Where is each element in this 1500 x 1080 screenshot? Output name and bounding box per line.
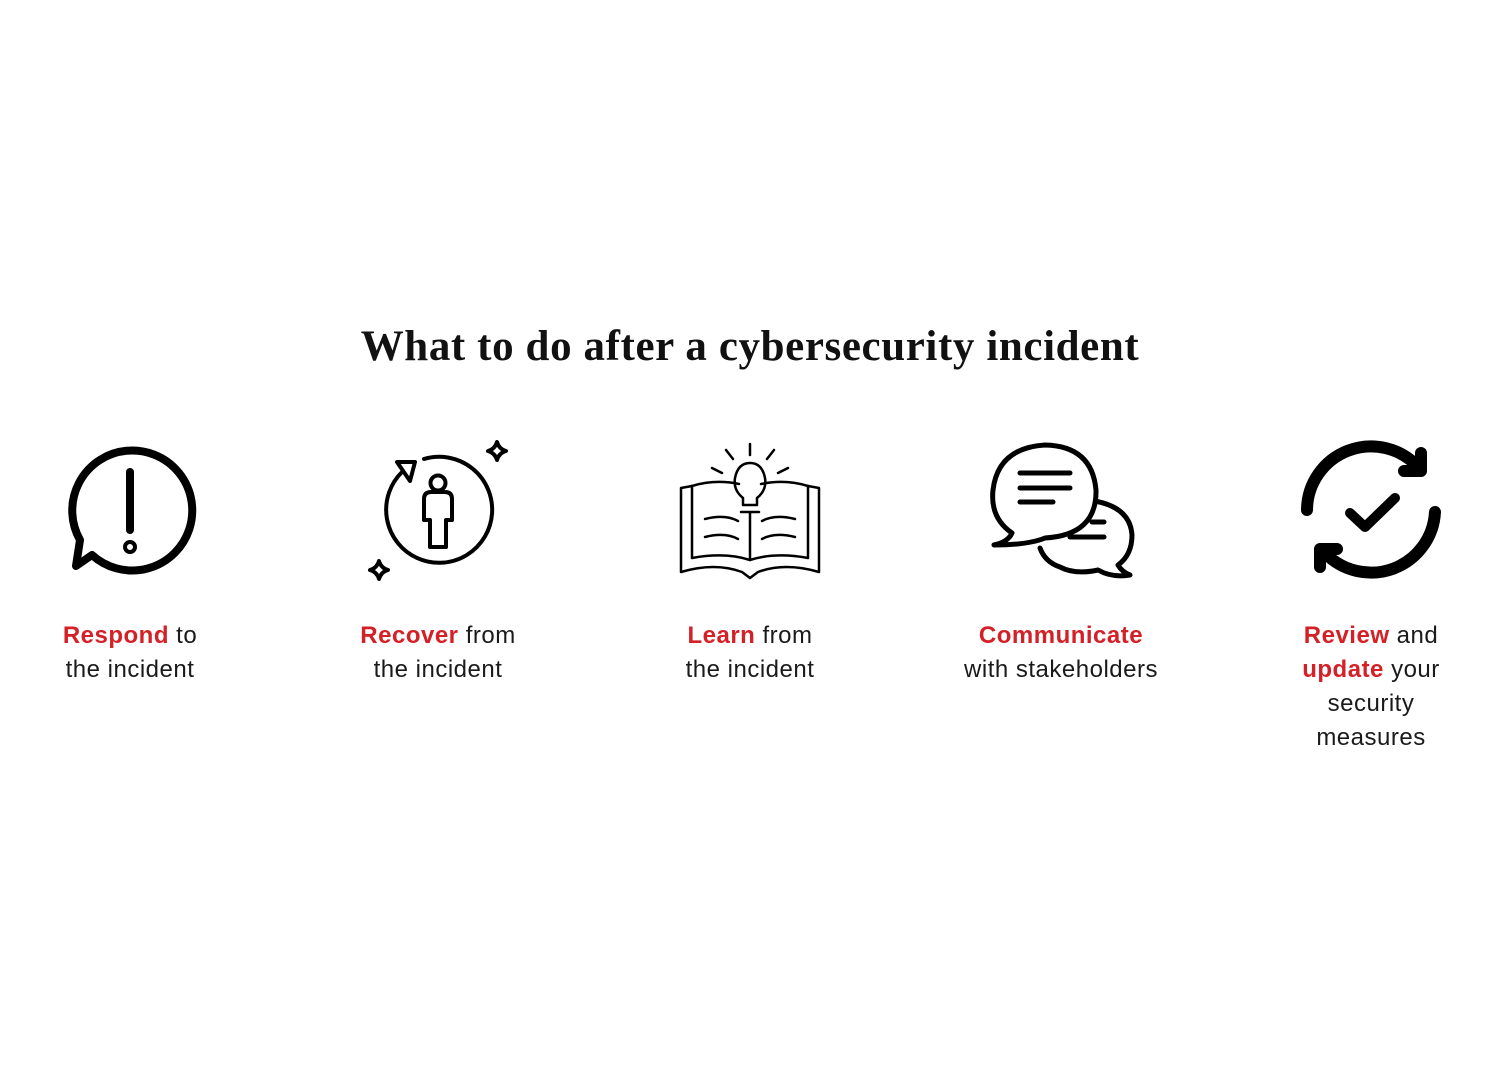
label: recover [360, 622, 516, 683]
label: learn [686, 622, 814, 683]
label: recover: the incident [374, 656, 502, 683]
label: respond [63, 622, 197, 683]
label: review: security [1328, 690, 1414, 717]
label: communicate: with stakeholders [964, 656, 1158, 683]
label: respond: Respond to [63, 622, 197, 649]
label: recover: Recover from [360, 622, 516, 649]
icon: refresh with check [1307, 446, 1435, 573]
label: review: Review and [1304, 622, 1438, 649]
label: review: measures [1316, 724, 1426, 751]
label: learn: Learn from [687, 622, 813, 649]
label: respond: the incident [66, 656, 194, 683]
label: communicate: Communicate [979, 622, 1143, 649]
icon: chat bubbles [993, 445, 1132, 576]
icon: exclamation speech bubble [72, 451, 192, 571]
icon: book with lightbulb [681, 444, 819, 578]
label: review [1302, 622, 1440, 751]
label: review: update your [1302, 656, 1440, 683]
title: What to do after a cybersecurity incident [361, 323, 1139, 370]
label: communicate [964, 622, 1158, 683]
icon: recover person [370, 442, 506, 579]
label: learn: the incident [686, 656, 814, 683]
